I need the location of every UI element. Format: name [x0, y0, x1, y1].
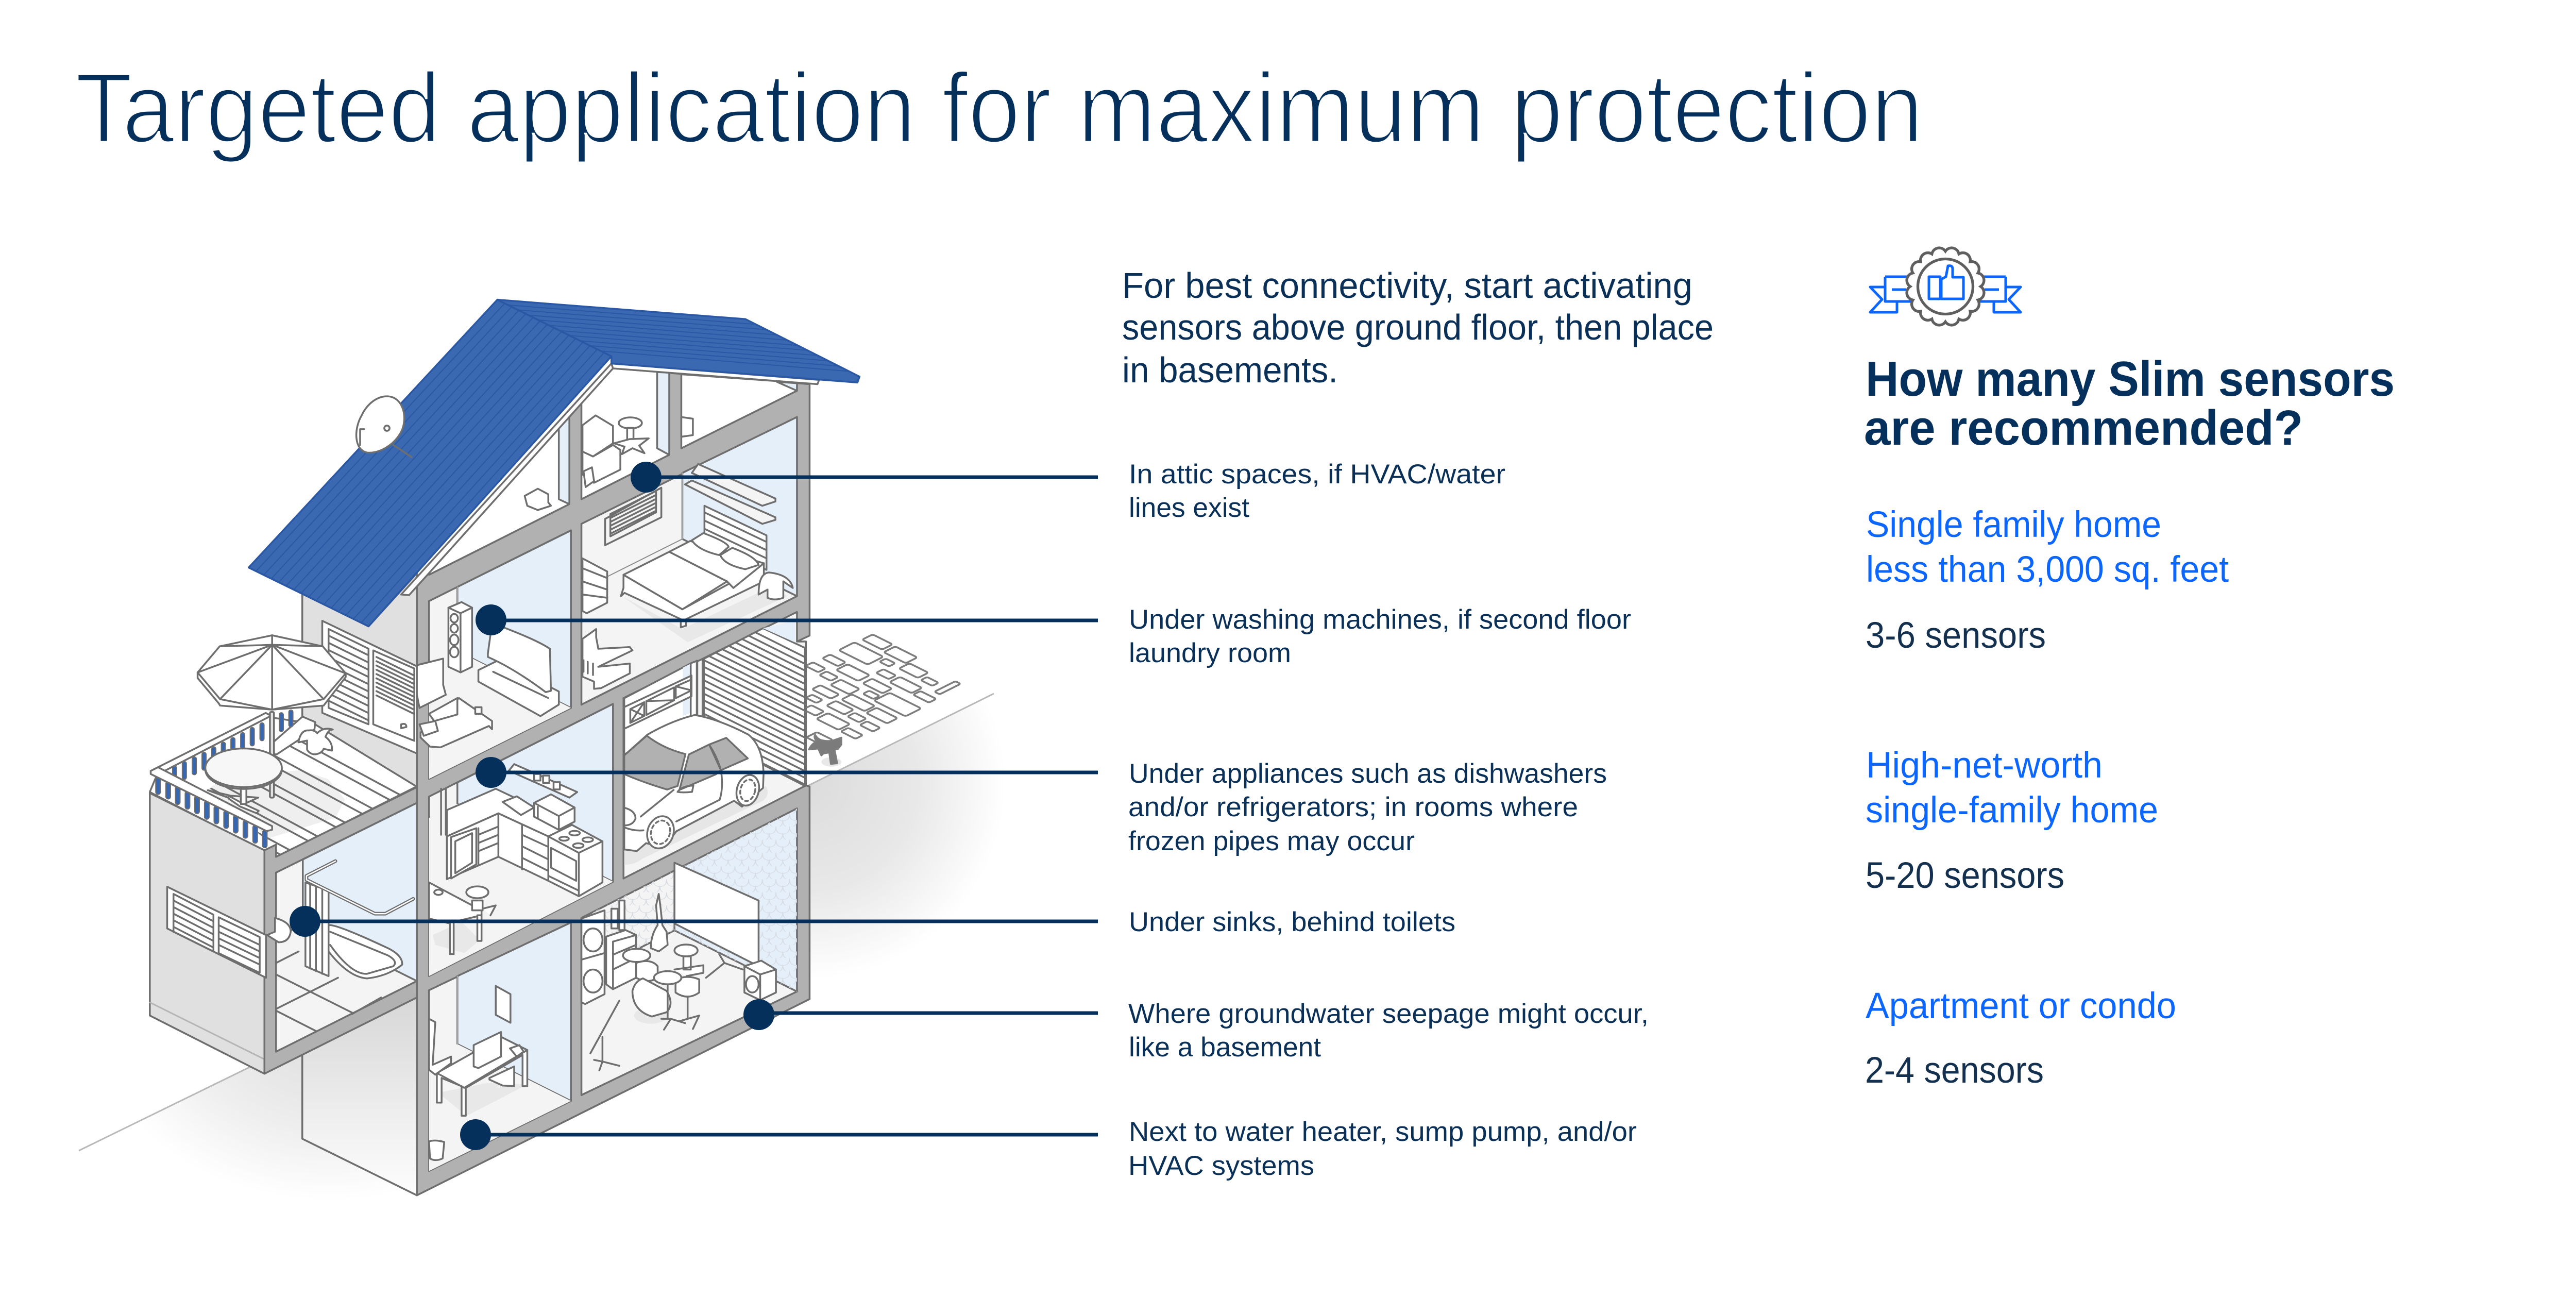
- front railing balusters: [158, 779, 265, 846]
- garage details: [624, 607, 805, 865]
- label: water heater: [1128, 1117, 1637, 1181]
- drum stools and cymbals: [623, 945, 703, 997]
- label: water heater: Next to water heater, sump pump, and/or: [1129, 1117, 1637, 1147]
- label: groundwater: [1128, 999, 1649, 1063]
- bathroom tiles: [276, 924, 381, 1031]
- toilet: [267, 918, 291, 942]
- label: appliances: frozen pipes may occur: [1128, 826, 1415, 856]
- callout dot: sinks: [290, 906, 320, 937]
- office chair: [429, 1019, 451, 1075]
- guitar: [651, 894, 668, 951]
- stool: [466, 886, 496, 915]
- blue tile wall: [674, 808, 797, 991]
- satellite dish: [357, 396, 412, 457]
- cut section structure: [417, 368, 809, 1195]
- headboard: [704, 506, 767, 570]
- bathtub: [329, 925, 402, 979]
- intro text: in basements.: [1122, 350, 1338, 390]
- shelf cabinet: [606, 930, 636, 989]
- attic bin: [681, 417, 693, 437]
- shower curtain: [306, 883, 329, 976]
- windshield: [624, 736, 686, 789]
- callout line: groundwater: [759, 1011, 1098, 1015]
- wall shelf: [509, 764, 577, 798]
- left roof plane: [249, 300, 612, 627]
- front rail: [150, 767, 272, 831]
- heading: how many sensors: are recommended?: [1864, 400, 2303, 456]
- bass drum: [633, 979, 671, 1017]
- callout line: washing machines: [491, 618, 1098, 622]
- music room: [582, 808, 797, 1095]
- sink: [503, 796, 534, 815]
- recommendation: single family home: Single family home: [1866, 504, 2161, 545]
- exterior balcony wall: [150, 793, 264, 1074]
- car lines: [624, 770, 722, 831]
- front wheel: [645, 815, 676, 850]
- recommendation: high-net-worth home: single-family home: [1866, 790, 2158, 831]
- living room: [401, 530, 571, 779]
- garage shelves: [624, 676, 691, 729]
- tv stand: [479, 660, 559, 716]
- label: appliances: Under appliances such as dishwashers: [1129, 759, 1607, 789]
- cabinets: [447, 814, 548, 881]
- deck base: [150, 717, 417, 857]
- office: [429, 922, 571, 1171]
- roof: [249, 300, 859, 627]
- callout dot: washing machines: [476, 604, 506, 635]
- right roof seams: [508, 305, 849, 372]
- stove: [548, 825, 602, 896]
- label: appliances: and/or refrigerators; in rooms where: [1128, 792, 1578, 822]
- car: [624, 715, 764, 851]
- deck planks: [209, 742, 400, 854]
- bedroom plant: [758, 572, 793, 599]
- desk: [437, 1037, 527, 1116]
- ribbon left: [1870, 277, 1911, 312]
- waste bin: [429, 1140, 444, 1160]
- icon: award badge with thumbs up: [1870, 248, 2021, 325]
- car shadow: [624, 786, 768, 865]
- door panel: [674, 863, 758, 966]
- kitchen: [429, 704, 613, 976]
- table shadow: [207, 770, 345, 838]
- cut section grey: [264, 787, 417, 1074]
- label: groundwater: Where groundwater seepage might occur,: [1128, 999, 1649, 1029]
- intro text: For best connectivity, start activating: [1122, 265, 1692, 306]
- recommendation: high-net-worth home: 5-20 sensors: [1866, 855, 2064, 896]
- driveway pavers and dog: [803, 634, 961, 767]
- ribbon right: [1979, 277, 2021, 312]
- lower left wall: [302, 994, 417, 1195]
- planter ledge: [273, 717, 315, 754]
- left roof seams: [256, 304, 604, 623]
- garage floor: [623, 612, 806, 879]
- callout dot: appliances: [476, 757, 506, 788]
- attic printer: [524, 488, 551, 510]
- tv: [488, 623, 551, 692]
- rear side window: [709, 738, 748, 770]
- garage back wall: [624, 661, 697, 754]
- recommendation: high-net-worth home: [1866, 745, 2158, 896]
- counter top: [447, 789, 572, 836]
- ground shadow left of house: [175, 1056, 354, 1168]
- callout dot: groundwater: [743, 999, 774, 1030]
- garage door slats: [705, 632, 804, 784]
- roof underside: [401, 363, 819, 595]
- umbrella: [198, 635, 346, 710]
- attic cabinet: [583, 415, 620, 483]
- heading: how many sensors: How many Slim sensors: [1866, 351, 2395, 407]
- kitchen table: [429, 882, 482, 954]
- balcony: [133, 635, 417, 857]
- label: attic: lines exist: [1129, 493, 1249, 523]
- recommendation: apartment or condo: [1865, 986, 2176, 1091]
- label: appliances: [1128, 759, 1607, 856]
- telephone: [510, 1045, 523, 1056]
- side chair: [417, 659, 446, 708]
- dishwasher: [451, 828, 476, 879]
- callout line: sinks: [305, 919, 1098, 923]
- intro text: sensors above ground floor, then place: [1122, 307, 1714, 347]
- glasses and jars: [494, 774, 560, 799]
- heading: how many sensors: [1864, 351, 2395, 456]
- garage door: [704, 628, 805, 786]
- umbrella pole: [270, 712, 274, 798]
- label: water heater: HVAC systems: [1128, 1151, 1314, 1181]
- speaker: [448, 602, 472, 672]
- shower rod inner: [307, 861, 413, 914]
- bedroom window: [605, 487, 662, 545]
- tower pc: [489, 1067, 514, 1086]
- rear wheel: [734, 774, 761, 807]
- bed shadow: [622, 586, 788, 642]
- badge rosette: [1907, 248, 1984, 325]
- round table: [206, 748, 282, 813]
- desk shadow: [438, 1083, 527, 1116]
- bathtub rim: [330, 932, 395, 974]
- main house section: [249, 300, 859, 1195]
- recommendation: high-net-worth home: High-net-worth: [1866, 745, 2103, 786]
- right roof plane: [497, 300, 859, 382]
- callout dot: attic: [631, 462, 662, 493]
- front railing balusters blue: [158, 779, 265, 846]
- drum stands: [662, 984, 699, 1030]
- intro text: [1122, 265, 1714, 390]
- microwave: [534, 795, 574, 830]
- back railing balusters blue: [175, 712, 291, 778]
- bathroom interior: [276, 803, 417, 1052]
- label: attic: In attic spaces, if HVAC/water: [1129, 459, 1505, 490]
- thumb: [1929, 266, 1963, 299]
- pipe: [441, 789, 446, 835]
- drawers: [583, 559, 607, 613]
- label: groundwater: like a basement: [1129, 1032, 1321, 1063]
- armchair: [583, 629, 633, 689]
- car body: [624, 715, 764, 851]
- label: washing machines: [1129, 604, 1631, 668]
- file box: [584, 467, 594, 487]
- bottles: [612, 901, 624, 930]
- bed: [621, 533, 764, 628]
- patio door slats: [329, 629, 414, 741]
- callout dot: water heater: [460, 1119, 491, 1150]
- plant: [298, 729, 333, 754]
- ground line right: [808, 694, 994, 786]
- back railing balusters: [175, 712, 291, 778]
- mic stand: [590, 1001, 619, 1070]
- recommendation: apartment or condo: Apartment or condo: [1866, 986, 2176, 1026]
- amp stand: [706, 954, 743, 978]
- patio door frame: [323, 621, 418, 754]
- door post: [691, 660, 703, 715]
- wall shelves: [692, 464, 775, 506]
- washer dryer stack: [582, 911, 604, 1004]
- label: washing machines: Under washing machines, if second floor: [1129, 604, 1631, 635]
- bathroom blue wall: [303, 803, 417, 981]
- amp: [744, 961, 776, 1000]
- callout line: appliances: [491, 771, 1098, 774]
- recommendation: apartment or condo: 2-4 sensors: [1865, 1050, 2044, 1091]
- recommendation: single family home: less than 3,000 sq. feet: [1866, 549, 2229, 590]
- ground band line: [150, 1002, 264, 1059]
- exterior window: [167, 887, 266, 978]
- bass drum shadow: [634, 1007, 668, 1024]
- tile back wall: [582, 870, 674, 978]
- recommendation: single family home: 3-6 sensors: [1866, 615, 2046, 656]
- blue corner: [763, 621, 795, 643]
- gable wall: [302, 573, 417, 790]
- back rail: [150, 713, 271, 771]
- title: Targeted application for maximum protection: [75, 52, 1923, 163]
- coffee table: [401, 698, 492, 747]
- kitchen table shadow: [433, 922, 480, 953]
- ground line left: [79, 1060, 264, 1151]
- bedroom: [582, 417, 797, 704]
- left wing with bathroom: [150, 787, 417, 1074]
- front side window: [680, 745, 721, 790]
- attic stool: [614, 417, 649, 454]
- label: sinks: Under sinks, behind toilets: [1129, 907, 1455, 937]
- ground shadow right of house: [810, 713, 974, 948]
- recommendation: single family home: [1866, 504, 2229, 656]
- attic rooms: [429, 368, 797, 575]
- label: attic: [1129, 459, 1505, 523]
- shower rod: [307, 861, 413, 914]
- callout line: water heater: [476, 1133, 1098, 1137]
- monitor: [473, 1032, 501, 1068]
- wall picture: [496, 986, 511, 1023]
- blue strip: [683, 664, 690, 716]
- callout line: attic: [646, 475, 1098, 479]
- house exterior walls: [302, 573, 418, 1195]
- label: washing machines: laundry room: [1129, 638, 1291, 668]
